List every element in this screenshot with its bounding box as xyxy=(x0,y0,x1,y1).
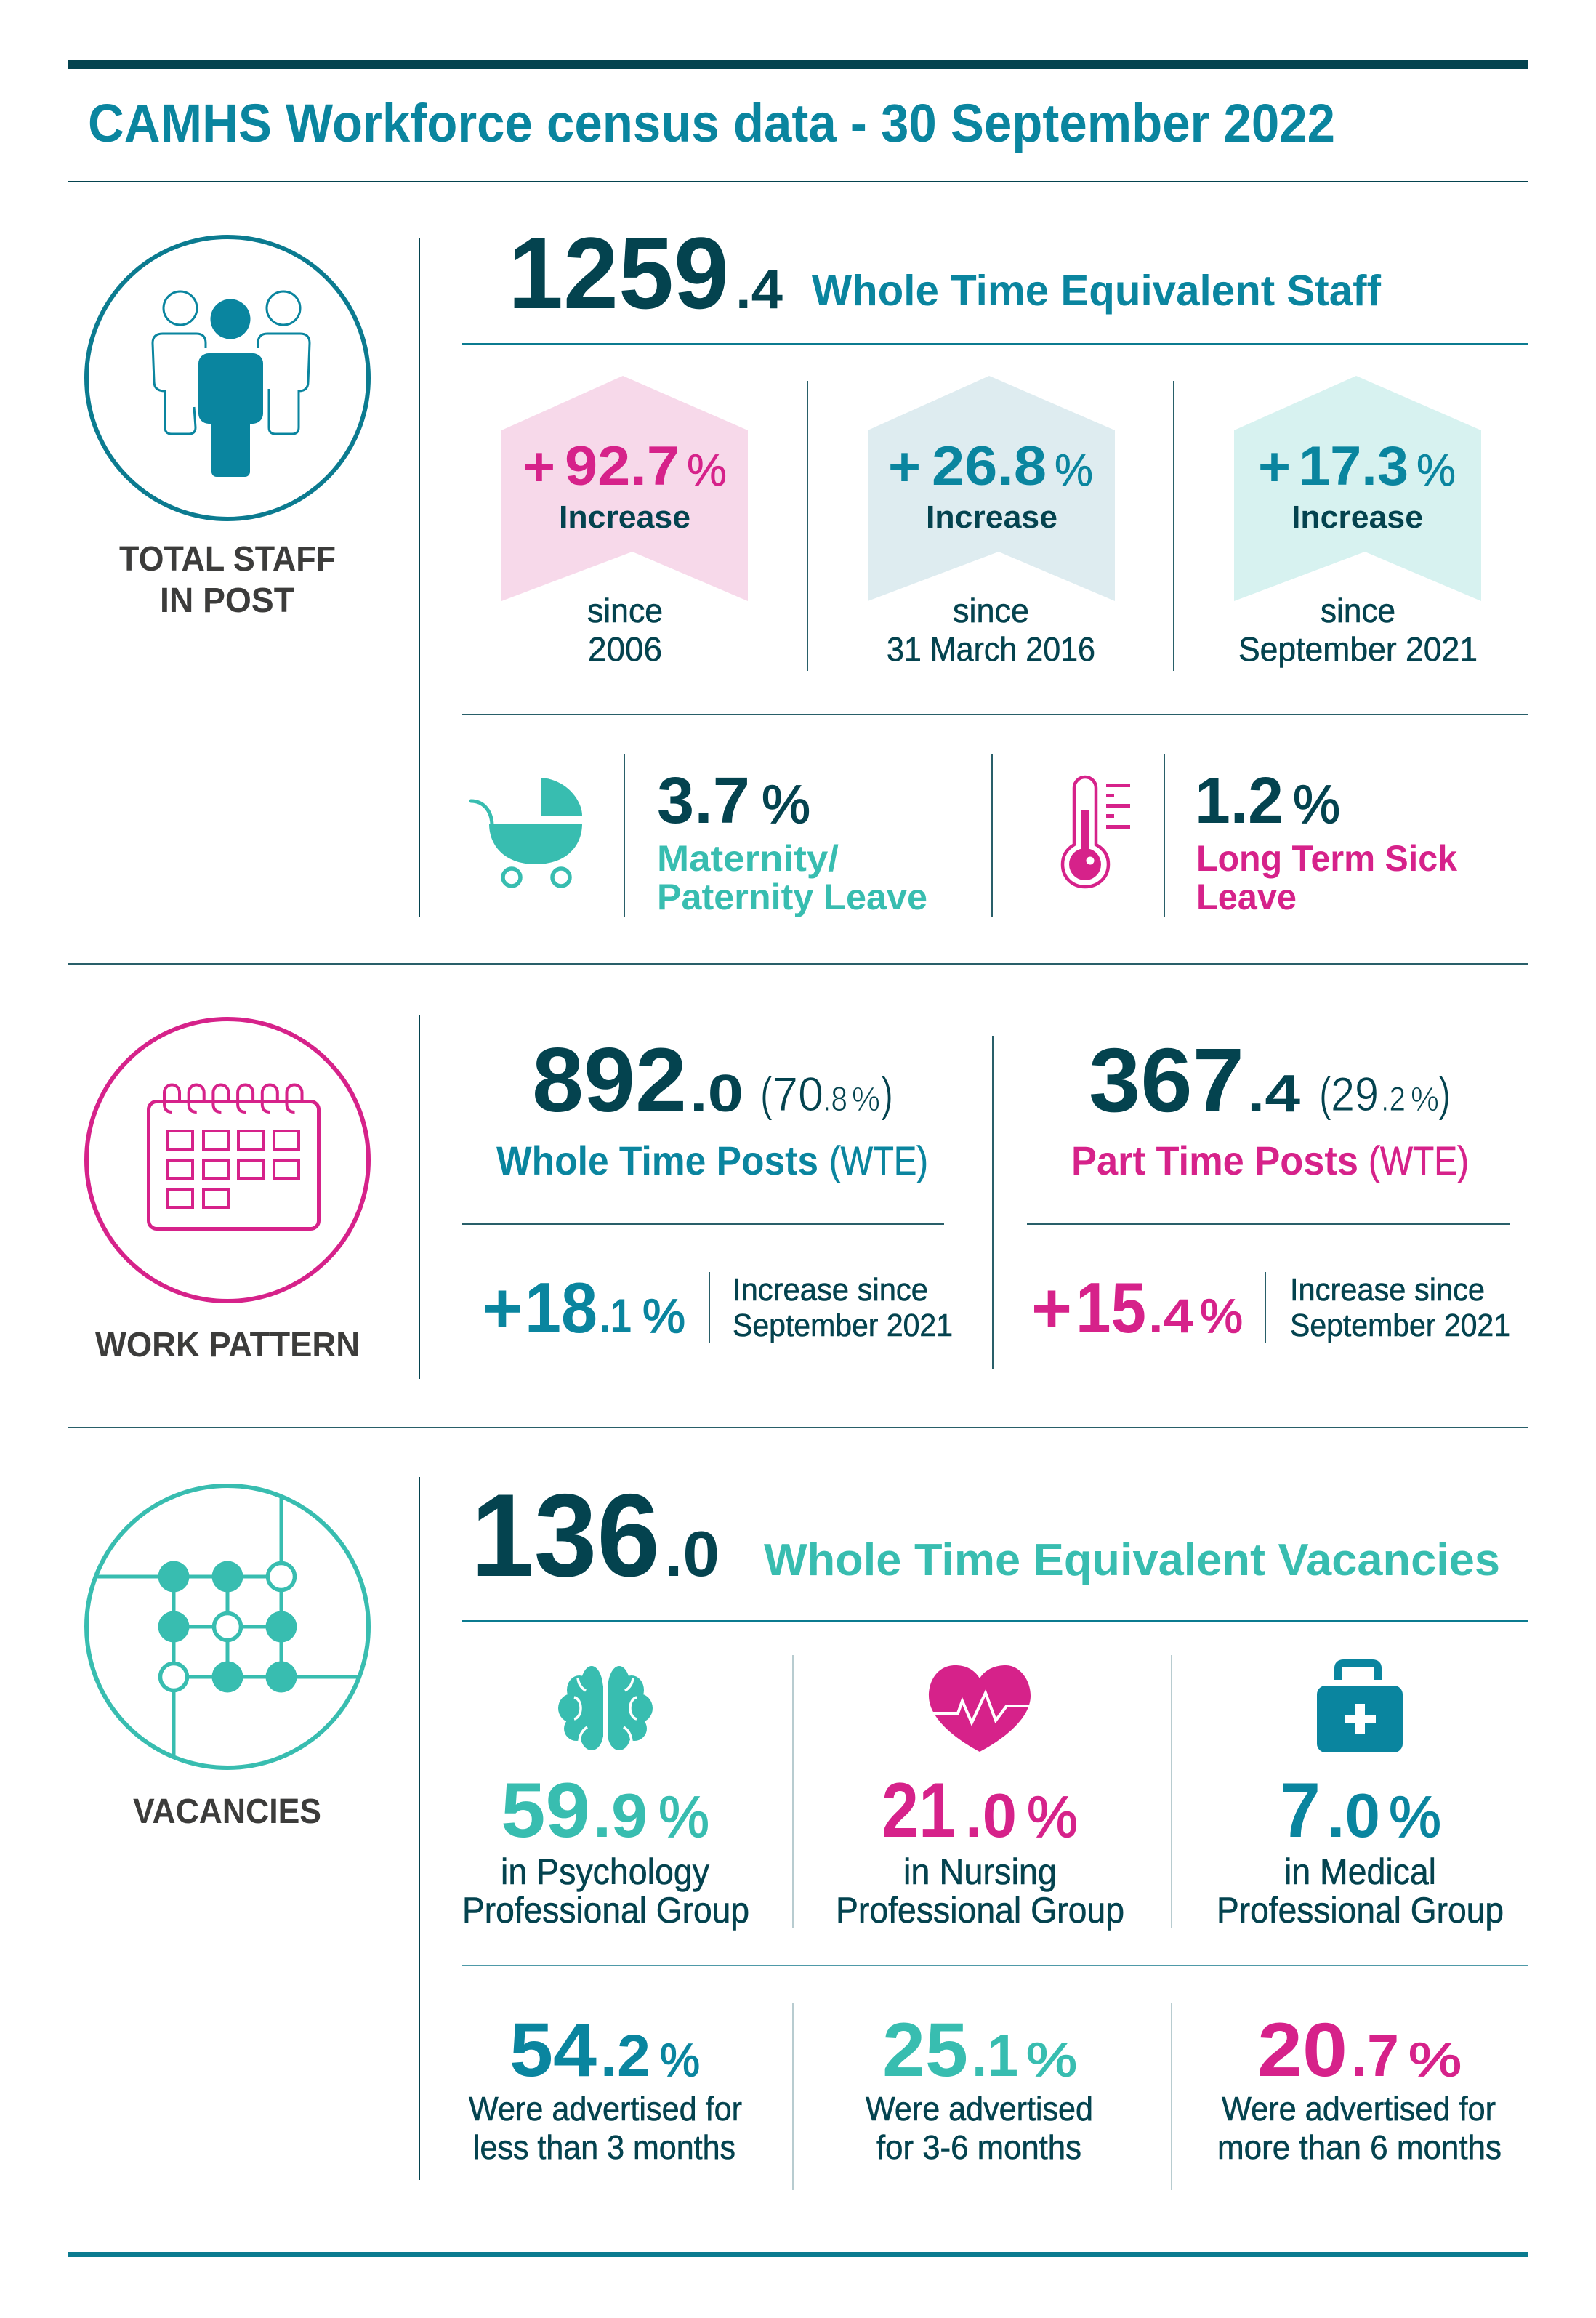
stat: 892.0 whole time posts: 70 xyxy=(773,1067,823,1121)
stat: +26.8% since 31 March 2016 xyxy=(868,376,1115,668)
stat: 21.0% in nursing professional group: 21 xyxy=(882,1766,956,1854)
icon: brain xyxy=(558,1666,653,1750)
icon: network nodes in circle xyxy=(86,1486,368,1768)
heading: work pattern: WORK PATTERN xyxy=(95,1326,360,1364)
stat: +15.4% increase since September 2021 xyxy=(1031,1268,1510,1348)
stat: +26.8% since 31 March 2016: % xyxy=(1055,446,1093,496)
stat: 7.0% in medical professional group: Professional Group xyxy=(1217,1890,1504,1931)
stat: +18.1% increase since September 2021: .1 xyxy=(600,1289,632,1343)
icon: thermometer xyxy=(1063,777,1130,887)
stat: 367.4 part time posts: 29 xyxy=(1331,1067,1379,1121)
stat: +15.4% increase since September 2021: 15 xyxy=(1076,1268,1146,1348)
stat: +92.7% since 2006 xyxy=(501,376,748,668)
stat: 59.9% in psychology professional group: in Psychology xyxy=(501,1851,709,1892)
stat: 7.0% in medical professional group: % xyxy=(1389,1784,1441,1849)
icon: pram xyxy=(471,778,582,886)
stat: 25.1% advertised for 3-6 months: .1 xyxy=(972,2023,1018,2089)
stat: 367.4 part time posts: .4 xyxy=(1247,1065,1300,1123)
stat: +92.7% since 2006: Increase xyxy=(559,499,690,535)
stat: 54.2% advertised for less than 3 months: Were advertised for xyxy=(469,2090,742,2128)
stat: 20.7% advertised for more than 6 months: more than 6 months xyxy=(1217,2128,1502,2166)
stat: +26.8% since 31 March 2016: Increase xyxy=(926,499,1057,535)
title: CAMHS Workforce census data - 30 September 2022 xyxy=(88,93,1335,153)
headline figure: 136.0 whole time equivalent vacancies: .0 xyxy=(664,1518,720,1590)
heading: vacancies: VACANCIES xyxy=(133,1792,321,1831)
stat: 367.4 part time posts: ( xyxy=(1319,1067,1331,1121)
stat: 3.7% maternity/paternity leave: % xyxy=(762,774,810,834)
stat: +18.1% increase since September 2021: + xyxy=(482,1268,523,1348)
stat: 1.2% long term sick leave: % xyxy=(1293,774,1340,834)
stat: +17.3% since September 2021: 17.3 xyxy=(1299,435,1408,497)
stat: 367.4 part time posts: % xyxy=(1411,1079,1439,1118)
headline figure: 136.0 whole time equivalent vacancies xyxy=(471,1470,1500,1601)
stat: +92.7% since 2006: 2006 xyxy=(588,630,662,668)
stat: +92.7% since 2006: % xyxy=(687,446,727,496)
stat: +18.1% increase since September 2021: 18 xyxy=(525,1268,597,1348)
stat: 1.2% long term sick leave: 1.2 xyxy=(1195,765,1283,837)
panel: total staff in post xyxy=(86,216,1528,917)
stat: 892.0 whole time posts: .0 xyxy=(690,1065,743,1123)
stat: +18.1% increase since September 2021 xyxy=(482,1268,953,1348)
stat: +17.3% since September 2021: September 2021 xyxy=(1238,630,1478,668)
stat: +18.1% increase since September 2021: Increase since xyxy=(733,1272,928,1308)
stat: 20.7% advertised for more than 6 months: .7 xyxy=(1351,2023,1399,2089)
stat: +15.4% increase since September 2021: + xyxy=(1031,1268,1072,1348)
stat: 59.9% in psychology professional group: 59 xyxy=(501,1766,590,1854)
stat: +92.7% since 2006: 92.7 xyxy=(565,435,680,497)
headline figure: 1259.4 whole time equivalent staff xyxy=(508,216,1381,330)
bottom bar xyxy=(68,2252,1528,2257)
stat: 1.2% long term sick leave: Long Term Sick xyxy=(1196,838,1457,879)
headline figure: 136.0 whole time equivalent vacancies: 136 xyxy=(471,1470,660,1601)
stat: 3.7% maternity/paternity leave: Maternity/ xyxy=(657,838,839,879)
stat: 367.4 part time posts: .2 xyxy=(1381,1079,1406,1118)
stat: 20.7% advertised for more than 6 months: 20 xyxy=(1257,2008,1347,2093)
stat: +15.4% increase since September 2021: .4 xyxy=(1148,1289,1193,1343)
stat: +15.4% increase since September 2021: Increase since xyxy=(1290,1272,1485,1308)
stat: 1.2% long term sick leave xyxy=(1195,765,1457,917)
heading: total staff in post xyxy=(119,540,336,620)
stat: 7.0% in medical professional group xyxy=(1217,1663,1504,1931)
stat: +18.1% increase since September 2021: September 2021 xyxy=(733,1308,953,1343)
stat: 892.0 whole time posts: Whole Time Posts xyxy=(496,1138,818,1183)
icon: medical bag xyxy=(1317,1663,1403,1752)
stat: 59.9% in psychology professional group xyxy=(462,1666,749,1931)
stat: 367.4 part time posts: Part Time Posts xyxy=(1071,1138,1358,1183)
stat: +26.8% since 31 March 2016: + xyxy=(888,436,921,498)
stat: 20.7% advertised for more than 6 months: % xyxy=(1408,2032,1462,2086)
stat: 54.2% advertised for less than 3 months: 54 xyxy=(509,2008,597,2093)
stat: +92.7% since 2006: since xyxy=(587,592,663,629)
stat: 54.2% advertised for less than 3 months: % xyxy=(660,2034,700,2086)
stat: 54.2% advertised for less than 3 months: less than 3 months xyxy=(473,2128,735,2166)
stat: 7.0% in medical professional group: in Medical xyxy=(1284,1851,1436,1892)
stat: 892.0 whole time posts: ) xyxy=(881,1067,893,1121)
heading: total staff in post: IN POST xyxy=(160,581,294,620)
stat: 54.2% advertised for less than 3 months xyxy=(469,2008,742,2166)
stat: +17.3% since September 2021: Increase xyxy=(1291,499,1423,535)
stat: +92.7% since 2006: + xyxy=(523,436,555,498)
stat: +17.3% since September 2021 xyxy=(1234,376,1481,668)
stat: 892.0 whole time posts: ( xyxy=(760,1067,773,1121)
stat: 3.7% maternity/paternity leave: 3.7 xyxy=(657,765,750,837)
stat: +17.3% since September 2021: + xyxy=(1258,436,1291,498)
stat: 59.9% in psychology professional group: .9 xyxy=(593,1782,648,1851)
headline figure: 1259.4 whole time equivalent staff: Whole Time Equivalent Staff xyxy=(812,267,1381,315)
panel: vacancies xyxy=(86,1470,1528,2190)
stat: +26.8% since 31 March 2016: since xyxy=(953,592,1029,629)
stat: 367.4 part time posts: 367 xyxy=(1089,1030,1244,1131)
headline figure: 1259.4 whole time equivalent staff: 1259 xyxy=(508,216,729,330)
stat: 21.0% in nursing professional group: .0 xyxy=(965,1782,1017,1851)
stat: 21.0% in nursing professional group: % xyxy=(1027,1784,1078,1849)
stat: 7.0% in medical professional group: .0 xyxy=(1327,1782,1380,1851)
panel: work pattern xyxy=(86,1015,1510,1379)
heading: total staff in post: TOTAL STAFF xyxy=(119,540,336,579)
stat: 3.7% maternity/paternity leave: Paternity Leave xyxy=(657,877,927,917)
stat: 20.7% advertised for more than 6 months: Were advertised for xyxy=(1222,2090,1496,2128)
stat: +26.8% since 31 March 2016: 31 March 2016 xyxy=(887,630,1095,668)
top bar xyxy=(68,60,1528,69)
headline figure: 136.0 whole time equivalent vacancies: Whole Time Equivalent Vacancies xyxy=(764,1535,1500,1585)
stat: 3.7% maternity/paternity leave xyxy=(657,765,927,917)
headline figure: 1259.4 whole time equivalent staff: .4 xyxy=(735,259,783,321)
stat: 367.4 part time posts: ) xyxy=(1438,1067,1451,1121)
stat: 54.2% advertised for less than 3 months: .2 xyxy=(600,2023,650,2089)
stat: 25.1% advertised for 3-6 months: Were advertised xyxy=(866,2090,1093,2128)
stat: 21.0% in nursing professional group: Professional Group xyxy=(836,1890,1124,1931)
stat: 25.1% advertised for 3-6 months: for 3-6 months xyxy=(876,2128,1081,2166)
stat: 892.0 whole time posts: (WTE) xyxy=(829,1138,928,1183)
stat: 1.2% long term sick leave: Leave xyxy=(1196,877,1297,917)
stat: 892.0 whole time posts xyxy=(496,1030,928,1183)
stat: +17.3% since September 2021: since xyxy=(1321,592,1395,629)
stat: 7.0% in medical professional group: 7 xyxy=(1280,1766,1321,1854)
stat: 21.0% in nursing professional group xyxy=(836,1665,1124,1931)
stat: 892.0 whole time posts: 892 xyxy=(532,1030,687,1131)
stat: 367.4 part time posts xyxy=(1071,1030,1469,1183)
stat: 367.4 part time posts: (WTE) xyxy=(1369,1138,1469,1183)
stat: +15.4% increase since September 2021: % xyxy=(1200,1289,1243,1343)
icon: calendar in circle xyxy=(86,1019,368,1301)
stat: +26.8% since 31 March 2016: 26.8 xyxy=(932,435,1047,497)
icon: heart with pulse xyxy=(929,1665,1032,1752)
stat: +18.1% increase since September 2021: % xyxy=(642,1289,685,1343)
stat: 59.9% in psychology professional group: Professional Group xyxy=(462,1890,749,1931)
stat: 892.0 whole time posts: % xyxy=(852,1079,880,1118)
stat: 25.1% advertised for 3-6 months: % xyxy=(1026,2032,1077,2086)
stat: 892.0 whole time posts: .8 xyxy=(823,1079,847,1118)
stat: 21.0% in nursing professional group: in Nursing xyxy=(903,1851,1057,1892)
stat: +15.4% increase since September 2021: September 2021 xyxy=(1290,1308,1510,1343)
stat: 25.1% advertised for 3-6 months xyxy=(866,2008,1093,2166)
stat: 59.9% in psychology professional group: % xyxy=(658,1784,709,1849)
stat: 20.7% advertised for more than 6 months xyxy=(1217,2008,1502,2166)
stat: 25.1% advertised for 3-6 months: 25 xyxy=(882,2008,968,2093)
icon: people in circle xyxy=(86,237,368,519)
stat: +17.3% since September 2021: % xyxy=(1416,446,1456,496)
